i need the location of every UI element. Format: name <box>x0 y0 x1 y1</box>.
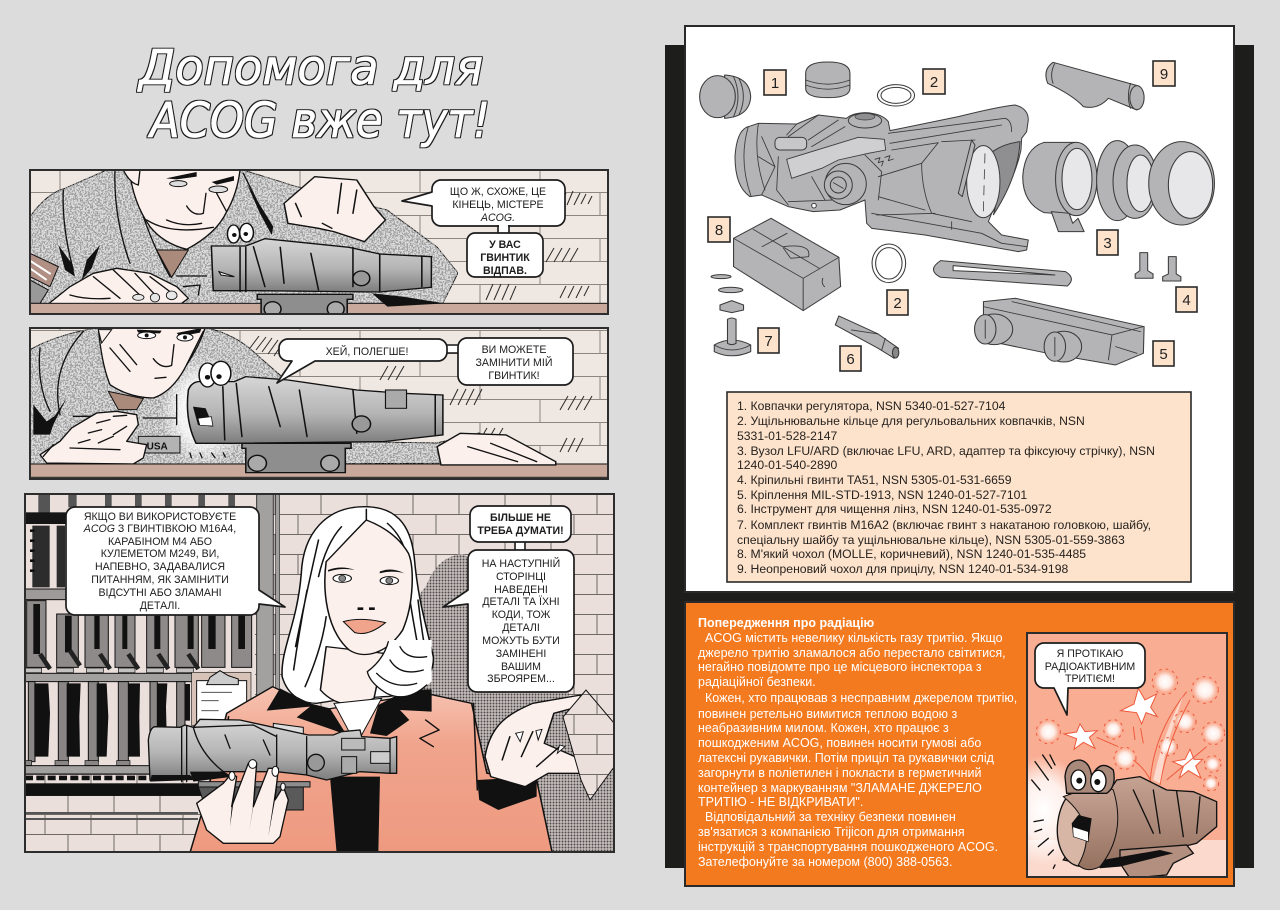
speech bubble: next page: МОЖУТЬ БУТИ <box>482 635 560 647</box>
scope <box>211 239 431 292</box>
scope mount <box>242 443 351 473</box>
speech bubble: leaking tritium: Я ПРОТІКАЮ <box>1057 648 1124 660</box>
speech bubble: replace screw: ВИ МОЖЕТЕ <box>482 344 546 356</box>
part 1: regulator caps <box>700 62 850 118</box>
clipboard <box>192 671 251 726</box>
strap <box>933 261 1071 286</box>
eyes and mouth <box>328 567 405 634</box>
parts list: 5. Кріплення MIL-STD-1913, NSN 1240-01-527-7101 <box>737 488 1027 502</box>
parts list <box>727 392 1191 582</box>
speech bubble: next page: СТОРІНЦІ <box>496 571 546 583</box>
mouth <box>1072 815 1092 842</box>
black backing strip <box>665 45 1254 868</box>
speech bubble: easy: ХЕЙ, ПОЛЕГШЕ! <box>326 345 408 358</box>
parts list: 7. Комплект гвинтів M16A2 (включає гвинт з накатаною головкою, шайбу, <box>737 518 1151 532</box>
table <box>28 464 612 477</box>
facial features <box>147 172 234 230</box>
warning text: пошкодженим ACOG, повинен носити гумові або <box>698 736 981 750</box>
warning text: Зателефонуйте за номером (800) 388-0563. <box>698 855 952 869</box>
collars <box>267 688 432 736</box>
number labels <box>708 61 1197 371</box>
soldier head <box>129 170 240 249</box>
glow around scope <box>162 358 236 464</box>
warning text: радіаційної безпеки. <box>698 675 816 689</box>
weapons rack <box>25 494 280 796</box>
speech bubble: leaking tritium: РАДІОАКТИВНИМ <box>1045 661 1135 673</box>
dark top <box>330 777 380 853</box>
scope mouth <box>193 407 213 427</box>
USA tape: USA <box>147 441 168 452</box>
warning text: латексні рукавички. Потім приціл та рукавички слід <box>698 751 995 765</box>
USA tape <box>138 436 180 453</box>
warning text: Кожен, хто працював з несправним джерелом тритію, <box>705 691 1017 705</box>
tube highlight <box>787 137 886 178</box>
face <box>325 520 412 654</box>
part 2: seal ring top <box>877 85 915 106</box>
middle rifle barrels <box>27 601 252 667</box>
parts list: 8. М'який чохол (MOLLE, коричневий), NSN 1240-01-535-4485 <box>737 547 1086 561</box>
speech bubble: M16A4 question: ДЕТАЛІ. <box>140 600 180 612</box>
main scope body <box>735 105 1028 252</box>
fireworks <box>1036 669 1225 791</box>
right hand <box>437 433 556 465</box>
hood <box>977 142 1020 215</box>
comic: leaking scope <box>1002 633 1227 878</box>
uniform folds <box>63 170 272 295</box>
speech bubble: next page: ВАШИМ <box>501 661 541 673</box>
shirt <box>334 698 382 735</box>
speech bubble: leaking tritium <box>1035 643 1145 715</box>
parts list: 9. Неопреновий чохол для прицілу, NSN 1240-01-534-9198 <box>737 562 1068 576</box>
wall hatching <box>250 336 592 452</box>
scope mount under the scope <box>198 782 310 820</box>
scope mount <box>256 294 354 313</box>
lower bricks and wall rail <box>26 812 198 820</box>
scope front <box>1052 780 1118 870</box>
speech bubble: easy <box>277 339 460 383</box>
warning text: Попередження про радіацію <box>698 616 875 630</box>
part 4: screws <box>1135 253 1181 281</box>
speech bubble: screw gone <box>467 224 543 277</box>
turret <box>848 113 882 128</box>
white flash <box>1002 755 1085 865</box>
speech bubble: ACOG the end: КІНЕЦЬ, МІСТЕРЕ <box>452 199 544 211</box>
part 3: lens assembly <box>1023 141 1214 232</box>
hair <box>282 507 433 703</box>
collar <box>157 250 188 277</box>
speech bubble: M16A4 question: КУЛЕМЕТОМ M249, ВИ, <box>101 548 219 560</box>
speech bubble: ACOG the end <box>402 180 565 226</box>
right post <box>256 495 274 696</box>
left hand <box>50 268 188 305</box>
windage knob <box>825 163 866 205</box>
warning text: повинен ретельно вимитися теплою водою з <box>698 707 958 721</box>
speech bubble: M16A4 question: КАРАБІНОМ M4 АБО <box>108 536 212 548</box>
broken wall edge <box>563 690 614 800</box>
parts list: 6. Інструмент для чищення лінз, NSN 1240-01-535-0972 <box>737 502 1052 516</box>
number labels: 2 <box>930 74 938 91</box>
scope body <box>1063 777 1217 867</box>
speech bubble: next page: НАВЕДЕНІ <box>494 584 548 596</box>
speech bubble: next page: ЗАМІНЕНІ <box>496 648 546 660</box>
soldier head <box>98 328 205 398</box>
comic panel 2: scared scope <box>28 328 612 479</box>
upper rifles <box>38 495 235 512</box>
collar <box>108 391 143 410</box>
left hand <box>40 411 147 464</box>
warning text: неабразивним милом. Кожен, хто працює з <box>698 721 949 735</box>
lower posts and black stocks <box>28 682 185 762</box>
scope eyes <box>227 223 253 243</box>
wall hatching <box>480 191 592 300</box>
parts list: 4. Кріпильні гвинти TA51, NSN 5305-01-531-6659 <box>737 473 1012 487</box>
speech bubble: replace screw <box>458 338 573 385</box>
warning text: інструкцій з транспортування пошкодженого ACOG. <box>698 840 998 854</box>
objective lens <box>967 146 1000 218</box>
table <box>31 302 607 313</box>
title: Допомога для <box>137 40 483 96</box>
part 9: neoprene cover <box>1046 62 1144 110</box>
eyes <box>1065 760 1114 793</box>
open hand <box>485 695 586 787</box>
speech bubble: no more thinking <box>470 506 571 552</box>
number labels: 2 <box>893 295 902 312</box>
part 5: mount <box>975 298 1144 365</box>
scope eyes <box>199 361 231 387</box>
speech bubble: ACOG the end: ЩО Ж, СХОЖЕ, ЦЕ <box>450 186 546 198</box>
speech bubble: next page: ДЕТАЛІ <box>502 622 540 634</box>
hair curl <box>367 640 432 697</box>
halftone wall shadow <box>400 554 614 852</box>
part 6: lens tool <box>835 316 899 358</box>
warning text: ACOG містить невелику кількість газу тритію. Якщо <box>705 631 1003 645</box>
sleeve flag <box>30 253 58 303</box>
warning text: зв'язатися з компанією Trijicon для отримання <box>698 825 965 839</box>
speech bubble: screw gone: ВІДПАВ. <box>483 265 527 277</box>
soldier uniform <box>31 329 482 464</box>
comic panel 3: woman holding scope <box>25 494 614 853</box>
scope mount <box>1120 845 1193 878</box>
warning text: контейнер з маркуванням "ЗЛАМАНЕ ДЖЕРЕЛО <box>698 781 982 795</box>
speech bubble: next page: ЗБРОЯРЕМ... <box>487 673 555 685</box>
warning text: загорнути в поліетилен і покласти в герметичний <box>698 766 981 780</box>
parts list: спеціальну шайбу та ущільнювальне кільце), NSN 5305-01-559-3863 <box>737 533 1125 547</box>
scope <box>148 719 397 782</box>
speech bubble: no more thinking: ТРЕБА ДУМАТИ! <box>477 525 564 537</box>
speech bubble: replace screw: ГВИНТИК! <box>488 370 540 382</box>
speech bubble: leaking tritium: ТРИТІЄМ! <box>1065 673 1115 685</box>
parts list: 1240-01-540-2890 <box>737 458 838 472</box>
part 7: screw kit <box>711 275 751 356</box>
facial features <box>98 328 203 378</box>
uniform folds <box>39 331 225 458</box>
warning text: Відповідальний за техніку безпеки повинен <box>705 810 956 824</box>
speech bubble: M16A4 question: ЯКЩО ВИ ВИКОРИСТОВУЄТЕ <box>84 511 236 523</box>
speech bubble: no more thinking: БІЛЬШЕ НЕ <box>490 512 551 524</box>
number labels: 8 <box>715 222 723 239</box>
speech bubble: next page: КОДИ, ТОЖ <box>492 609 550 621</box>
floor rail <box>25 766 165 774</box>
title: ACOG вже тут! <box>147 93 490 149</box>
warning text: негайно повідомте про це місцевого інспектора з <box>698 660 982 674</box>
panel: radiation warning <box>685 602 1234 886</box>
speech bubble: M16A4 question: ACOG З ГВИНТІВКОЮ M16A4, <box>83 523 236 535</box>
parts list: 2. Ущільнювальне кільце для регульовальних ковпачків, NSN <box>737 414 1085 428</box>
parts list: 1. Ковпачки регулятора, NSN 5340-01-527-7104 <box>737 399 1006 413</box>
parts list: 5331-01-528-2147 <box>737 429 838 443</box>
number labels: 4 <box>1182 292 1191 309</box>
jacket <box>190 687 552 852</box>
part 2: lower seal ring <box>872 244 906 283</box>
speech bubble: next page: НА НАСТУПНІЙ <box>482 557 560 570</box>
soldier uniform <box>30 170 458 307</box>
number labels: 1 <box>771 75 779 92</box>
speech bubble: M16A4 question: ВІДСУТНІ АБО ЗЛАМАНІ <box>98 587 222 599</box>
warning text <box>698 616 1017 869</box>
speech bubble: screw gone: ГВИНТИК <box>480 252 530 264</box>
right hand <box>284 177 385 242</box>
neck <box>320 647 384 704</box>
speech bubble: M16A4 question <box>66 507 285 615</box>
speech bubble: next page: ДЕТАЛІ ТА ЇХНІ <box>482 596 560 608</box>
speech bubble: replace screw: ЗАМІНИТИ МІЙ <box>476 356 552 369</box>
number labels: 9 <box>1160 66 1168 83</box>
speech bubble: M16A4 question: НАПЕВНО, ЗАДАВАЛИСЯ <box>95 561 225 573</box>
warning text: ТРИТІЮ - НЕ ВІДКРИВАТИ". <box>698 795 863 809</box>
parts list: 3. Вузол LFU/ARD (включає LFU, ARD, адаптер та фіксуючу стрічку), NSN <box>737 444 1155 458</box>
speech bubble: ACOG the end: ACOG. <box>480 212 515 224</box>
hand on scope <box>197 760 288 843</box>
part 8: soft pouch <box>734 218 841 311</box>
panel: parts diagram <box>685 26 1234 592</box>
number labels: 7 <box>764 333 773 350</box>
shelf <box>25 673 193 682</box>
number labels: 5 <box>1159 346 1168 363</box>
speech bubble: next page <box>443 550 574 692</box>
scope <box>187 377 443 443</box>
number labels: 6 <box>846 351 855 368</box>
title <box>137 40 490 149</box>
comic panel 1: soldier and scope <box>28 170 612 317</box>
lightning mark <box>875 156 893 166</box>
speech bubble: M16A4 question: ПИТАННЯМ, ЯК ЗАМІНИТИ <box>91 574 229 586</box>
number labels: 3 <box>1103 235 1112 252</box>
warning text: джерело тритію зламалося або перестало світитися, <box>698 646 1006 660</box>
speech bubble: screw gone: У ВАС <box>489 239 521 251</box>
bracket on top of scope <box>273 723 303 737</box>
